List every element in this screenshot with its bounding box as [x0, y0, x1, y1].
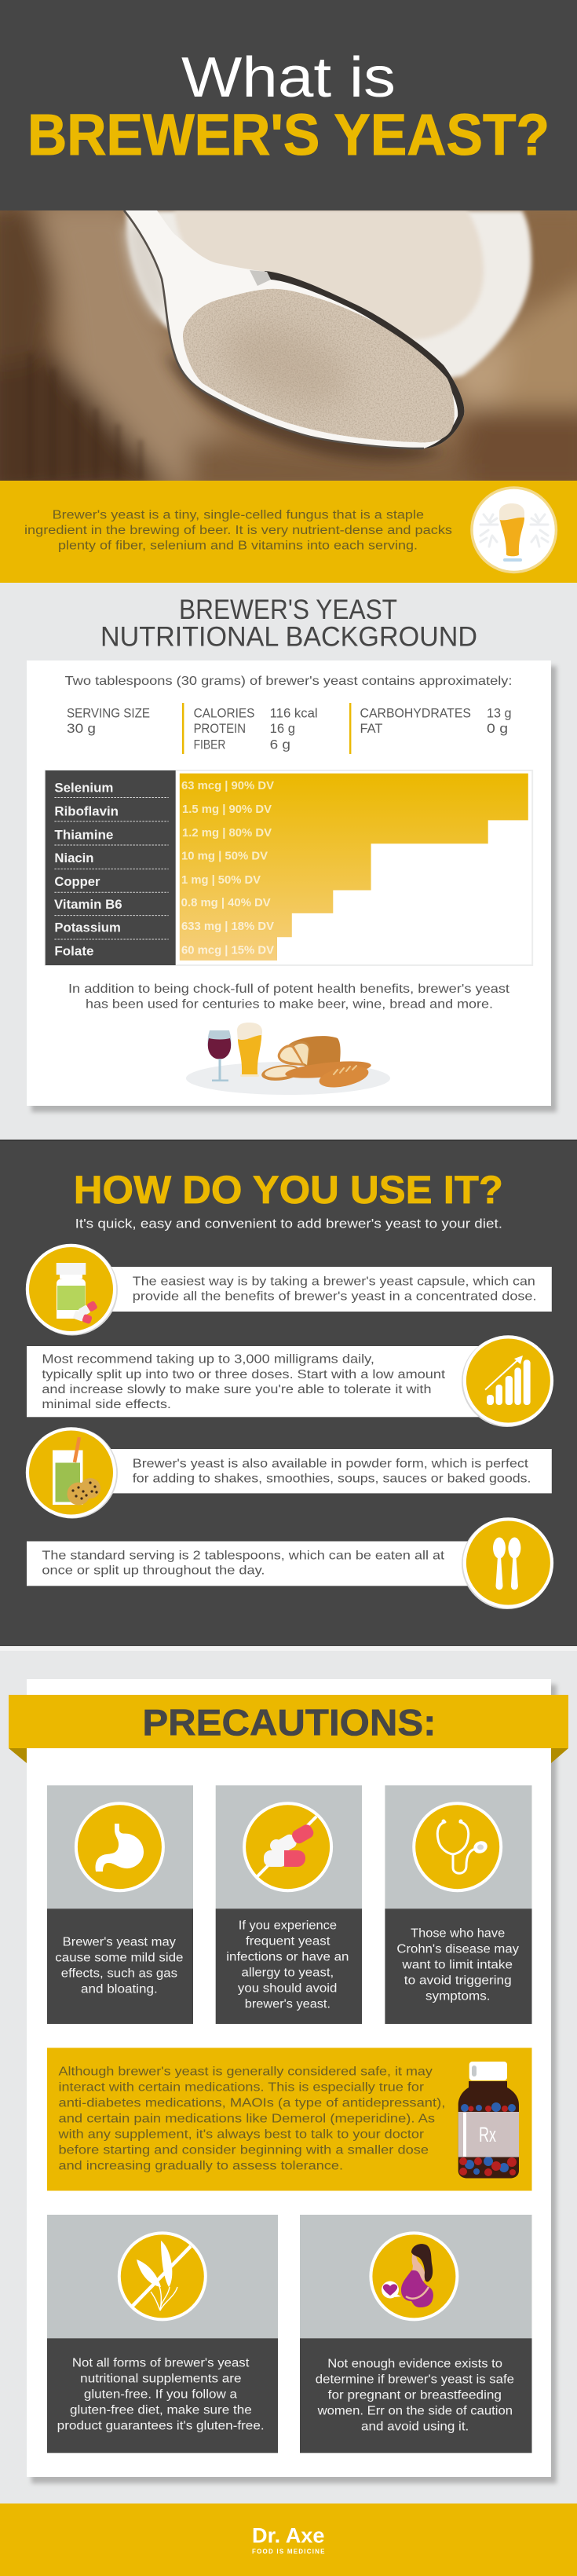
- nutrient names: [54, 781, 122, 959]
- text: Crohn's: want to limit intake: [401, 1959, 513, 1972]
- text: pregnancy: and avoid using it.: [361, 2420, 469, 2433]
- card shadow: [31, 1685, 557, 2483]
- row: capsule: provide all the benefits of brewer's yeast in a concentrated dose.: [133, 1290, 537, 1304]
- text: allergy: allergy to yeast,: [242, 1967, 334, 1980]
- card shadow: [31, 666, 557, 1112]
- intro text: [24, 509, 452, 553]
- row: powder: Brewer's yeast is also available in powder form, which is perfect: [133, 1457, 528, 1470]
- nutrient names: Potassium: [54, 920, 121, 935]
- icon: supplement bottle: [26, 1244, 118, 1335]
- nutrition facts table: CARBOHYDRATES: [360, 707, 471, 721]
- value labels: [181, 780, 274, 957]
- spoon left edge: [124, 210, 424, 448]
- nutrition facts table: 116 kcal: [270, 707, 318, 721]
- footer with Dr. Axe logo: [0, 2504, 577, 2576]
- ribbon heading: PRECAUTIONS:: [142, 1702, 436, 1744]
- text: allergy: [226, 1919, 349, 2011]
- logo wordmark: Dr. Axe: [252, 2524, 325, 2548]
- heading: nutritional background: NUTRITIONAL BACKGROUND: [100, 622, 477, 653]
- text: side effects: effects, such as gas: [61, 1967, 177, 1980]
- text: gluten-free: [57, 2357, 265, 2433]
- text: Crohn's: Crohn's disease may: [396, 1943, 519, 1956]
- text: Crohn's: symptoms.: [425, 1990, 490, 2003]
- serving intro: Two tablespoons (30 grams) of brewer's yeast contains approximately:: [64, 675, 512, 688]
- heading: nutritional background: BREWER'S YEAST: [179, 595, 397, 625]
- panel: yeast infections and allergy: [216, 1785, 362, 2024]
- text: pregnancy: for pregnant or breastfeeding: [328, 2389, 502, 2402]
- bar chart: daily values: [46, 770, 532, 965]
- nutrient names: Thiamine: [54, 827, 113, 842]
- nutrient names: Selenium: [54, 781, 113, 796]
- nutrition facts table: PROTEIN: [194, 722, 246, 736]
- stepped value bars: [180, 774, 528, 961]
- value labels: 0.8 mg | 40% DV: [181, 897, 271, 909]
- callout: medication interactions: [47, 2048, 532, 2191]
- callout text: with any supplement, it's always best to talk to your doctor: [57, 2128, 425, 2142]
- spoon body: [126, 210, 464, 448]
- value labels: 10 mg | 50% DV: [181, 850, 268, 862]
- icon: prescription bottle: Rx: [479, 2123, 496, 2146]
- nutrition facts table: FAT: [360, 722, 383, 736]
- text: gluten-free: Not all forms of brewer's yeast: [72, 2357, 250, 2370]
- text: allergy: If you experience: [239, 1919, 337, 1933]
- text: pregnancy: determine if brewer's yeast is safe: [316, 2373, 514, 2386]
- nutrient names: Niacin: [54, 851, 94, 865]
- icon: beer glass: [470, 486, 557, 573]
- row: standard serving: [27, 1517, 553, 1609]
- icon: stethoscope: [412, 1802, 502, 1892]
- text: side effects: cause some mild side: [55, 1951, 183, 1964]
- intro text: ingredient in the brewing of beer. It is very nutrient-dense and packs: [24, 524, 452, 537]
- callout text: and increasing gradually to assess tolerance.: [58, 2160, 343, 2173]
- text: side effects: and bloating.: [81, 1982, 158, 1996]
- text: Crohn's: [396, 1927, 519, 2003]
- value labels: 1 mg | 50% DV: [181, 874, 261, 887]
- panel: stomach side effects: [47, 1785, 193, 2024]
- icon: smoothie and cookies: [26, 1427, 118, 1519]
- photo: spoon of brewer's yeast over bowl: [0, 204, 577, 503]
- row: daily dose: Most recommend taking up to 3,000 milligrams daily,: [42, 1353, 374, 1367]
- nutrition facts table: FIBER: [194, 738, 225, 752]
- section: how do you use it: [0, 1140, 577, 1651]
- row: daily dose: and increase slowly to make sure you're able to tolerate it with: [42, 1383, 432, 1396]
- nutrition facts table: [67, 703, 512, 754]
- nutrient names: Folate: [54, 944, 94, 959]
- header: title: [0, 0, 577, 210]
- row: capsule: [26, 1244, 552, 1335]
- callout text: Although brewer's yeast is generally considered safe, it may: [58, 2066, 433, 2078]
- icon: rising bar chart: [462, 1335, 553, 1427]
- nutrition facts table: 30 g: [67, 722, 96, 736]
- nutrition facts table: 13 g: [487, 707, 512, 721]
- intro band: [0, 481, 577, 583]
- value labels: 63 mcg | 90% DV: [181, 780, 274, 792]
- ribbon heading: [9, 1695, 568, 1763]
- nutrient names: Riboflavin: [54, 803, 119, 818]
- closing text: In addition to being chock-full of potent health benefits, brewer's yeast: [68, 982, 510, 996]
- text: gluten-free: gluten-free diet, make sure the: [70, 2404, 252, 2417]
- bowl: [119, 210, 535, 381]
- spoon shadow on burlap: [165, 353, 447, 461]
- text: side effects: Brewer's yeast may: [63, 1935, 176, 1948]
- nutrition facts table: CALORIES: [194, 707, 254, 721]
- value labels: 60 mcg | 15% DV: [181, 944, 274, 957]
- text: gluten-free: nutritional supplements are: [80, 2373, 242, 2386]
- row: powder: for adding to shakes, smoothies, soups, sauces or baked goods.: [133, 1472, 531, 1486]
- row: daily dose: typically split up into two or three doses. Start with a low amount: [42, 1368, 446, 1381]
- value labels: 633 mg | 18% DV: [181, 920, 274, 933]
- nutrition facts table: 0 g: [487, 722, 508, 736]
- title line: What is: What is: [181, 46, 396, 109]
- heading: nutritional background: [100, 595, 477, 653]
- value labels: 1.5 mg | 90% DV: [182, 803, 272, 816]
- icon: crossed-out wheat: [118, 2231, 207, 2321]
- callout text: before starting and consider beginning with a smaller dose: [58, 2144, 429, 2157]
- heading: how do you use it: HOW DO YOU USE IT?: [74, 1168, 503, 1212]
- text: pregnancy: [316, 2358, 514, 2433]
- text: allergy: frequent yeast: [246, 1935, 330, 1948]
- text: allergy: infections or have an: [226, 1951, 349, 1964]
- title line: Brewer's Yeast: BREWER'S YEAST?: [27, 102, 550, 167]
- intro text: plenty of fiber, selenium and B vitamins into each serving.: [58, 539, 418, 553]
- icon: crossed-out capsules: [243, 1802, 333, 1892]
- row: capsule: The easiest way is by taking a brewer's yeast capsule, which can: [133, 1275, 535, 1288]
- illustration: wine, beer and bread: [186, 1023, 390, 1095]
- text: Crohn's: to avoid triggering: [404, 1974, 512, 1988]
- closing text: [68, 982, 510, 1012]
- value labels: 1.2 mg | 80% DV: [182, 827, 272, 840]
- nutrition card: [27, 660, 551, 1106]
- text: pregnancy: women. Err on the side of caution: [317, 2404, 513, 2417]
- icon: two spoons: [462, 1517, 553, 1609]
- nutrition facts table: 6 g: [270, 738, 290, 752]
- section: precautions: [9, 1679, 568, 2483]
- callout text: anti-diabetes medications, MAOIs (a type of antidepressant),: [58, 2096, 445, 2109]
- spoon dark rim: [254, 271, 464, 448]
- text: side effects: [55, 1935, 183, 1996]
- nutrition facts table: SERVING SIZE: [67, 707, 150, 721]
- icon: prescription bottle: [458, 2062, 519, 2179]
- text: gluten-free: gluten-free. If you follow a: [84, 2388, 237, 2402]
- panel: Crohn's disease: [385, 1785, 532, 2024]
- nutrient names: Vitamin B6: [54, 897, 122, 912]
- row: standard serving: The standard serving is 2 tablespoons, which can be eaten all at: [42, 1549, 445, 1563]
- precautions card: [27, 1679, 551, 2477]
- callout text: and certain pain medications like Demerol (meperidine). As: [58, 2112, 435, 2125]
- text: allergy: you should avoid: [238, 1982, 337, 1996]
- closing text: has been used for centuries to make beer, wine, bread and more.: [86, 998, 493, 1012]
- row: daily dose: minimal side effects.: [42, 1398, 171, 1411]
- icon: pregnant woman: [369, 2231, 458, 2321]
- icon: stomach: [75, 1802, 165, 1892]
- text: gluten-free: product guarantees it's gluten-free.: [57, 2419, 265, 2433]
- subheading: It's quick, easy and convenient to add brewer's yeast to your diet.: [75, 1217, 502, 1231]
- text: pregnancy: Not enough evidence exists to: [327, 2358, 502, 2371]
- section: nutritional background: [0, 583, 577, 1140]
- intro text: Brewer's yeast is a tiny, single-celled fungus that is a staple: [53, 509, 424, 521]
- nutrient names: Copper: [54, 874, 100, 889]
- row: powder: [26, 1427, 552, 1519]
- panel: pregnancy: [300, 2215, 532, 2453]
- callout text: interact with certain medications. This is especially true for: [58, 2080, 425, 2094]
- text: allergy: brewer's yeast.: [245, 1998, 330, 2011]
- row: standard serving: once or split up throughout the day.: [42, 1564, 265, 1578]
- row: daily dose: [27, 1335, 553, 1427]
- logo tagline: FOOD IS MEDICINE: [252, 2548, 325, 2555]
- callout text: [57, 2066, 445, 2173]
- panel: gluten-free: [47, 2215, 278, 2453]
- text: Crohn's: Those who have: [411, 1927, 505, 1941]
- nutrition facts table: 16 g: [270, 722, 295, 736]
- yeast powder: [183, 289, 455, 443]
